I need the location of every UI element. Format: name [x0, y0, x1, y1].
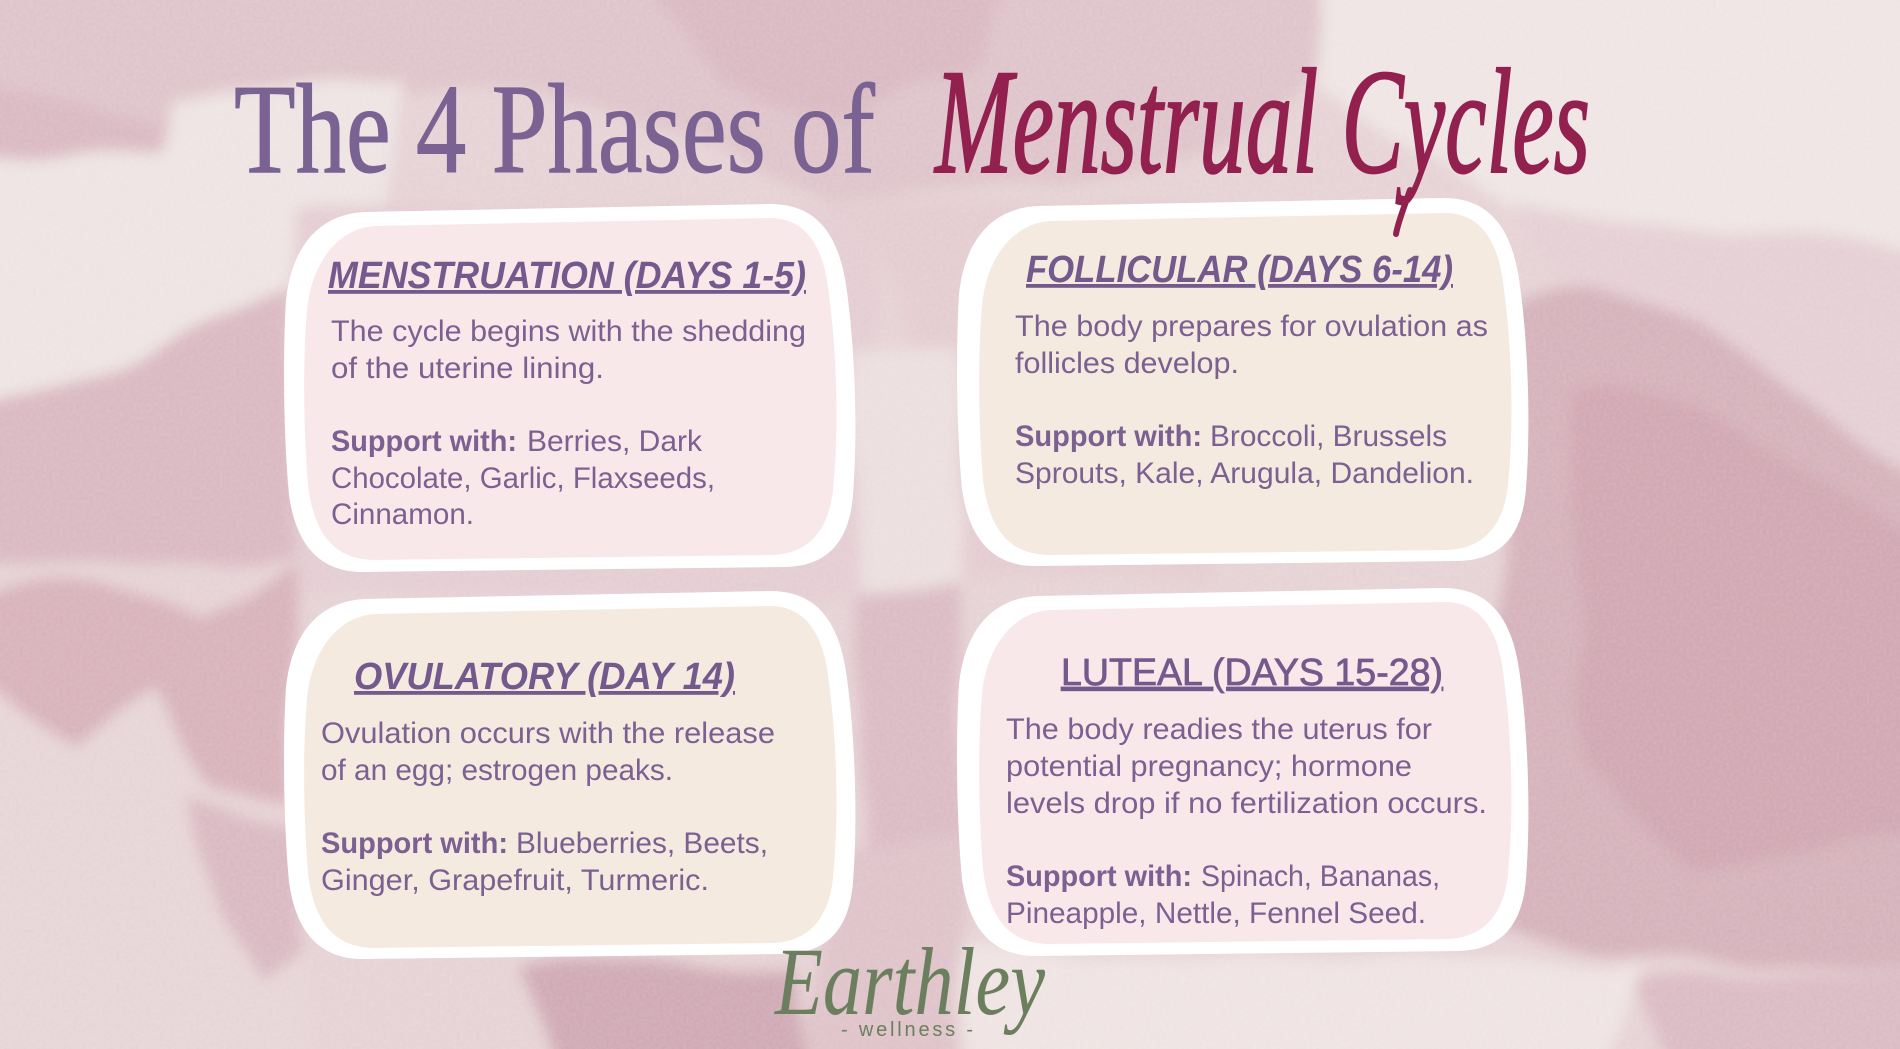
description: potential pregnancy; hormone [1006, 750, 1412, 783]
description: The cycle begins with the shedding [331, 315, 806, 348]
description [1006, 713, 1487, 820]
description [331, 315, 806, 385]
card border [957, 588, 1528, 956]
description: The body readies the uterus for [1006, 713, 1432, 746]
title: script part [934, 39, 1590, 234]
card border [957, 198, 1528, 566]
support foods [1006, 860, 1440, 930]
description: of the uterine lining. [331, 352, 604, 385]
support foods: Blueberries, Beets, [516, 827, 768, 860]
panel: luteal [957, 588, 1528, 956]
logo tagline: - wellness - [841, 1019, 973, 1041]
heading: LUTEAL (DAYS 15-28) [1061, 652, 1443, 694]
title: serif part: The 4 Phases of [234, 58, 875, 200]
description: of an egg; estrogen peaks. [321, 754, 673, 787]
card border [284, 204, 855, 572]
support foods: Broccoli, Brussels [1210, 420, 1447, 453]
logo wordmark: Earthley [773, 928, 1045, 1035]
support foods [331, 425, 715, 531]
logo: Earthley wellness [773, 928, 1045, 1041]
panel: menstruation [284, 204, 855, 572]
description [1015, 310, 1488, 380]
support foods: Support with: [321, 827, 508, 860]
support foods: Berries, Dark [527, 425, 702, 458]
card fill [979, 213, 1511, 555]
card border [284, 591, 855, 959]
support foods: Support with: [1015, 420, 1202, 453]
support foods: Ginger, Grapefruit, Turmeric. [321, 864, 709, 897]
support foods: Cinnamon. [331, 498, 474, 531]
card fill [979, 602, 1511, 944]
description: levels drop if no fertilization occurs. [1006, 787, 1487, 820]
support foods [1015, 420, 1474, 490]
heading: FOLLICULAR (DAYS 6-14) [1026, 249, 1453, 291]
support foods: Support with: [1006, 860, 1192, 893]
panel: follicular [957, 198, 1528, 566]
description [321, 717, 775, 787]
card fill [304, 218, 836, 560]
description: Ovulation occurs with the release [321, 717, 775, 750]
title [234, 39, 1590, 234]
support foods: Pineapple, Nettle, Fennel Seed. [1006, 897, 1426, 930]
support foods: Spinach, Bananas, [1201, 860, 1440, 893]
panel: ovulatory [284, 591, 855, 959]
support foods [321, 827, 768, 897]
description: follicles develop. [1015, 347, 1239, 380]
description: The body prepares for ovulation as [1015, 310, 1488, 343]
support foods: Support with: [331, 425, 517, 458]
support foods: Chocolate, Garlic, Flaxseeds, [331, 462, 715, 495]
card fill [304, 606, 836, 948]
support foods: Sprouts, Kale, Arugula, Dandelion. [1015, 457, 1474, 490]
heading: MENSTRUATION (DAYS 1-5) [328, 255, 806, 297]
heading: OVULATORY (DAY 14) [354, 656, 735, 698]
